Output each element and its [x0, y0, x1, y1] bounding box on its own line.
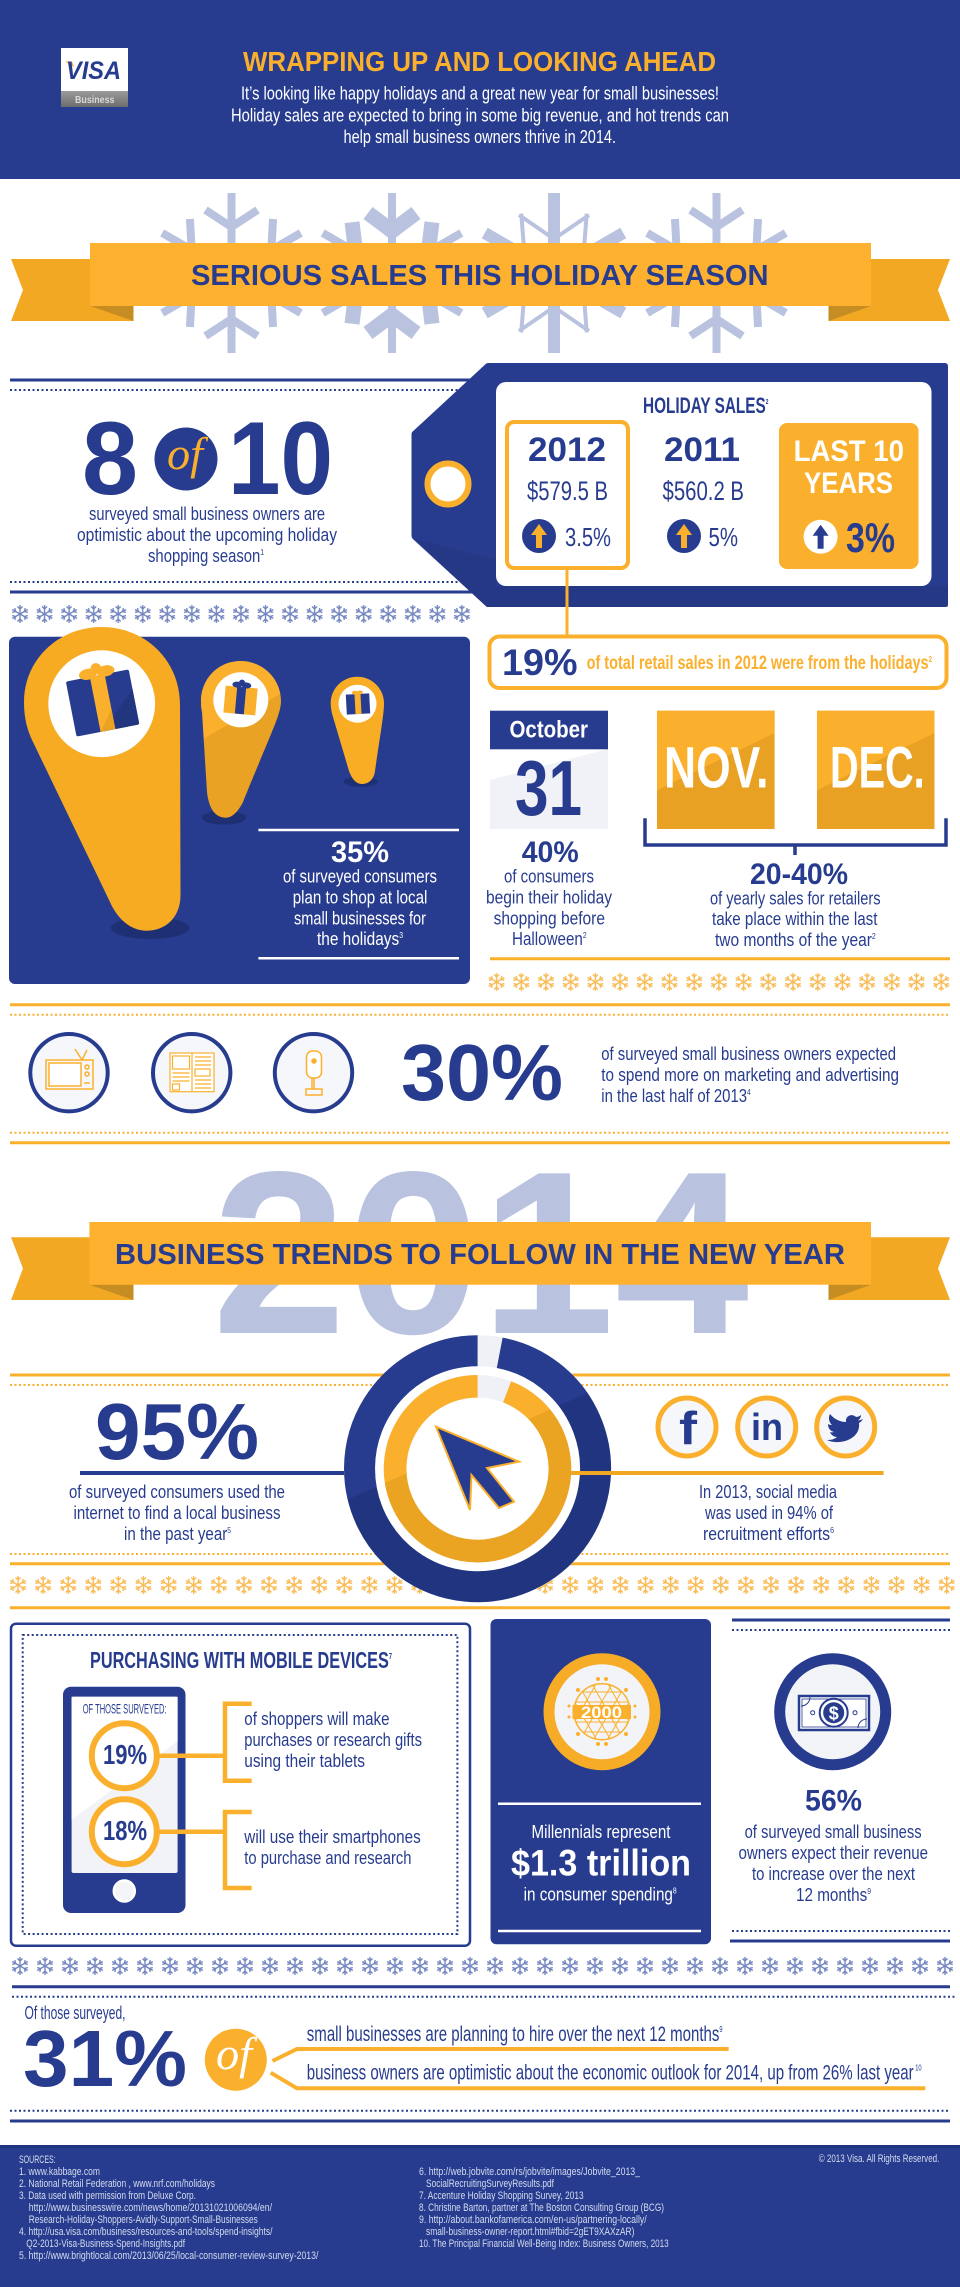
stat: 35%: 3: [399, 931, 403, 940]
stat: 40%: shopping before: [494, 908, 605, 928]
stat: 56%: owners expect their revenue: [738, 1843, 928, 1863]
holiday sales heading: 2: [766, 399, 769, 406]
callout lines: [271, 2049, 925, 2088]
stat: 35%: plan to shop at local: [293, 887, 427, 907]
header intro text: [231, 84, 729, 147]
price tag: holiday sales: [412, 366, 948, 607]
last 10 years box: YEARS: [804, 467, 893, 500]
stat: 56%: 56%: [805, 1785, 862, 1818]
stat: 95%: 5: [227, 1526, 231, 1535]
of badge orange: [205, 2028, 267, 2091]
header intro text: Holiday sales are expected to bring in some big revenue, and hot trends can: [231, 106, 729, 126]
logo: Visa Business: VISA: [66, 57, 121, 85]
stat: 35%: small businesses for: [294, 908, 426, 928]
holiday sales heading: HOLIDAY SALES: [643, 393, 819, 418]
panel heading: PURCHASING WITH MOBILE DEVICES: [90, 1647, 513, 1673]
text: $1.3 trillion: [498, 1804, 701, 1931]
footer: sources: SocialRecruitingSurveyResults.pdf: [426, 2178, 555, 2190]
header intro text: It’s looking like happy holidays and a great new year for small businesses!: [241, 84, 719, 104]
text: $1.3 trillion: 8: [673, 1887, 677, 1896]
footer: sources: 5. http://www.brightlocal.com/2013/06/25/local-consumer-review-survey-2013/: [19, 2250, 319, 2262]
snowflake row blue: [8, 604, 474, 624]
text: tablets: purchases or research gifts: [244, 1730, 422, 1750]
text: marketing spend: in the last half of 2013: [601, 1086, 777, 1106]
header intro text: help small business owners thrive in 2014.: [344, 127, 616, 147]
text: tablets: using their tablets: [244, 1751, 365, 1771]
icon: dollar bill medallion: $: [829, 1704, 839, 1724]
stat: 20-40%: two months of the year: [715, 930, 897, 950]
2011 column: [662, 431, 744, 553]
text: hiring and optimism: small businesses are planning to hire over the next 12 months: [307, 2023, 883, 2046]
panel: millennials: [490, 1619, 711, 1944]
stat: 95%: of surveyed consumers used the: [69, 1482, 285, 1502]
footer: sources: 7. Accenture Holiday Shopping Survey, 2013: [419, 2190, 584, 2202]
callout: 19% of retail sales: 2: [929, 655, 932, 664]
of badge: [154, 428, 218, 490]
of badge orange: of: [216, 2028, 258, 2079]
stat: 35%: the holidays: [317, 929, 413, 949]
pin small: [331, 677, 384, 787]
icon: dollar bill medallion: [780, 1659, 886, 1765]
callout: 19% of retail sales: [490, 636, 946, 688]
stat: 56%: 12 months: [796, 1885, 880, 1905]
icon: microphone: [275, 1034, 352, 1111]
last 10 years box: LAST 10: [794, 435, 904, 468]
text: smartphones: [243, 1827, 421, 1868]
tag hole: [428, 464, 468, 504]
stat: 8 of 10: 8: [82, 401, 138, 517]
text: marketing spend: [601, 1044, 899, 1106]
ribbon heading: serious sales: [11, 243, 950, 321]
icon: linkedin: in: [751, 1407, 783, 1449]
stat: 19%: [92, 1723, 157, 1788]
2012 column: 3.5%: [565, 522, 611, 552]
footer: sources: Q2-2013-Visa-Business-Spend-Insights.pdf: [26, 2238, 186, 2250]
connector and bracket: tablets: [159, 1704, 252, 1781]
stat: 20-40%: 20-40%: [750, 858, 848, 891]
icon: television: [30, 1034, 108, 1111]
footer: sources: http://www.businesswire.com/news/home/20131021006094/en/: [29, 2202, 273, 2214]
stat: 8 of 10: shopping season: [148, 546, 284, 566]
stat: 31%: 31%: [23, 2014, 187, 2103]
snowflake row orange: [484, 972, 954, 992]
2011 column: 5%: [708, 522, 738, 552]
footer: sources: 4. http://usa.visa.com/business/resources-and-tools/spend-insights/: [19, 2226, 273, 2238]
panel heading: 7: [389, 1652, 392, 1661]
footer: sources: 6. http://web.jobvite.com/rs/jobvite/images/Jobvite_2013_: [419, 2166, 641, 2178]
text: hiring and optimism: 10: [914, 2063, 922, 2072]
text: marketing spend: to spend more on marketing and advertising: [601, 1065, 899, 1085]
panel: purchasing with mobile devices: [11, 1624, 470, 1946]
stat: 56%: [738, 1785, 928, 1905]
month tile: Dec: [817, 711, 934, 829]
icon: linkedin: [738, 1398, 796, 1456]
text: $1.3 trillion: $1.3 trillion: [511, 1843, 691, 1884]
snowflake row blue wide: [8, 1956, 958, 1976]
stat: 20-40%: [710, 858, 881, 950]
stat: 31%: Of those surveyed,: [24, 2003, 125, 2023]
header title: WRAPPING UP AND LOOKING AHEAD: [243, 46, 716, 77]
icon: facebook: [658, 1398, 716, 1456]
stat: 8 of 10: 10: [228, 401, 333, 517]
callout: 19% of retail sales: 19%: [502, 642, 578, 683]
stat: 40%: [486, 836, 612, 949]
calendar: October 31: 31: [515, 744, 582, 832]
panel: local shopping pins: [9, 627, 470, 984]
snowflakes behind ribbon: [149, 193, 799, 353]
stat: 40%: of consumers: [504, 866, 594, 886]
stat: 35%: [258, 830, 459, 958]
phone illustration: OF THOSE SURVEYED:: [83, 1700, 167, 1716]
header band: [0, 0, 960, 179]
big 2014 numeral: 2014: [212, 1124, 749, 1383]
stat: 8 of 10: 1: [260, 548, 264, 557]
stat: 95%: 95%: [95, 1387, 259, 1476]
text: tablets: [244, 1709, 422, 1771]
month tile: Nov: NOV.: [664, 736, 768, 801]
phone illustration: [63, 1687, 186, 1913]
stat: 40%: begin their holiday: [486, 887, 612, 907]
footer: sources: 1. www.kabbage.com: [19, 2166, 100, 2178]
text: social media recruitment: In 2013, social media: [699, 1482, 838, 1502]
icon: 2000 globe medallion: [549, 1659, 655, 1765]
stat: 8 of 10: optimistic about the upcoming holiday: [77, 525, 337, 545]
stat: 35%: 35%: [331, 836, 389, 869]
text: social media recruitment: 6: [830, 1526, 834, 1535]
stat: 56%: 9: [867, 1887, 871, 1896]
logo: Visa Business: Business: [75, 95, 115, 106]
text: smartphones: will use their smartphones: [243, 1827, 421, 1847]
month tile: Nov: [657, 711, 775, 829]
pin large: [24, 627, 189, 939]
last 10 years box: 3%: [846, 514, 895, 561]
footer: sources: 2. National Retail Federation , www.nrf.com/holidays: [19, 2178, 215, 2190]
stat: 18%: 18%: [103, 1815, 147, 1846]
stat: 56%: to increase over the next: [752, 1864, 915, 1884]
footer: sources: Research-Holiday-Shoppers-Avidly-Support-Small-Businesses: [29, 2214, 258, 2226]
text: social media recruitment: was used in 94% of: [704, 1503, 834, 1523]
stat: 20-40%: of yearly sales for retailers: [710, 888, 881, 908]
2012 column: $579.5 B: [527, 476, 608, 506]
footer: sources: 8. Christine Barton, partner at The Boston Consulting Group (BCG): [419, 2202, 664, 2214]
text: smartphones: to purchase and research: [244, 1848, 412, 1868]
snowflake row orange wide: [6, 1575, 960, 1595]
stat: 56%: of surveyed small business: [745, 1822, 922, 1842]
stat: 40%: 2: [583, 931, 587, 940]
stat: 95%: internet to find a local business: [74, 1503, 280, 1523]
2012 column: [507, 422, 628, 568]
stat: 95%: in the past year: [124, 1524, 247, 1544]
stat: 8 of 10: [77, 401, 337, 566]
text: hiring and optimism: 9: [719, 2025, 723, 2034]
cursor arrow: [436, 1427, 519, 1510]
footer: sources: small-business-owner-report.html#fbid=2gET9XAXzAR): [426, 2226, 634, 2238]
stat: 19%: 19%: [103, 1739, 147, 1770]
footer: sources: SOURCES:: [19, 2154, 56, 2166]
pin medium: [201, 661, 281, 825]
stat: 8 of 10: surveyed small business owners are: [89, 504, 325, 524]
2012 column: 2012: [528, 431, 606, 469]
text: hiring and optimism: [307, 2023, 922, 2084]
text: $1.3 trillion: in consumer spending: [524, 1885, 700, 1905]
stat: 20-40%: 2: [872, 932, 876, 941]
last 10 years box: [779, 423, 918, 569]
calendar: October 31: [490, 711, 608, 832]
2011 column: 2011: [664, 431, 740, 469]
logo: Visa Business: [61, 48, 128, 107]
text: social media recruitment: recruitment efforts: [703, 1524, 848, 1544]
icon: facebook: f: [679, 1402, 698, 1454]
ribbon heading: business trends: BUSINESS TRENDS TO FOLLOW IN THE NEW YEAR: [115, 1239, 845, 1271]
stat: 20-40%: take place within the last: [712, 909, 878, 929]
footer: sources: 3. Data used with permission from Deluxe Corp.: [19, 2190, 196, 2202]
ribbon heading: serious sales: SERIOUS SALES THIS HOLIDAY SEASON: [191, 260, 769, 292]
stat: 40%: Halloween: [512, 929, 596, 949]
stat: 30%: 30%: [401, 1028, 563, 1117]
ribbon heading: business trends: [11, 1222, 950, 1300]
2011 column: $560.2 B: [662, 476, 744, 506]
icon: 2000 globe medallion: 2000: [581, 1703, 622, 1722]
footer: sources: [0, 2145, 960, 2287]
footer: sources: 9. http://about.bankofamerica.com/en-us/partnering-locally/: [419, 2214, 647, 2226]
footer: sources: 10. The Principal Financial Well-Being Index: Business Owners, 2013: [419, 2238, 669, 2250]
calendar: October 31: October: [510, 716, 588, 743]
of badge: of: [167, 428, 209, 479]
stat: 35%: of surveyed consumers: [283, 866, 437, 886]
text: marketing spend: 4: [747, 1088, 751, 1097]
bracket under months: [645, 818, 946, 855]
icon: twitter: [817, 1398, 875, 1456]
stat: 40%: 40%: [522, 836, 579, 869]
icon: newspaper: [153, 1034, 230, 1111]
stat: 95%: [69, 1387, 346, 1544]
connector and bracket: smartphones: [159, 1812, 252, 1888]
text: tablets: of shoppers will make: [244, 1709, 390, 1729]
text: marketing spend: of surveyed small business owners expected: [601, 1044, 896, 1064]
stat: 18%: [92, 1799, 157, 1864]
text: social media recruitment: [699, 1482, 838, 1544]
donut chart with cursor: [344, 1335, 611, 1602]
text: $1.3 trillion: Millennials represent: [532, 1822, 670, 1842]
